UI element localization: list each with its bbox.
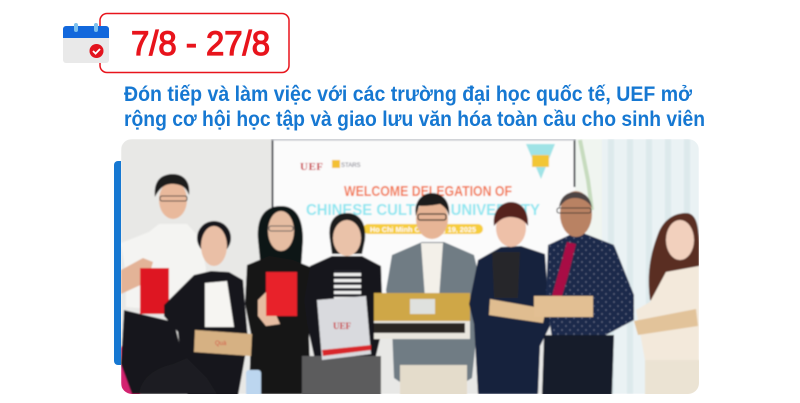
- projection screen: CHINESE CULTURE UNIVERSITY: [306, 202, 541, 219]
- person 4: UEF: [333, 321, 352, 331]
- water bottle: [246, 370, 261, 396]
- window and curtain: [574, 139, 699, 394]
- person 8: [634, 213, 700, 396]
- heading: Đón tiếp và làm việc với các trường đại học quốc tế, UEF mở: [124, 83, 692, 106]
- projection screen: WELCOME DELEGATION OF: [344, 183, 512, 200]
- person 2: Quà: [215, 341, 227, 347]
- date badge: [100, 14, 289, 72]
- projection screen: [270, 139, 576, 294]
- person 2: [164, 221, 252, 396]
- icon: calendar: [63, 23, 109, 63]
- photo: delegation group: [121, 139, 700, 398]
- projection screen: STARS: [341, 163, 361, 169]
- photo content: [121, 139, 700, 398]
- person 1: [121, 174, 206, 394]
- person 6: [469, 202, 550, 394]
- heading: rộng cơ hội học tập và giao lưu văn hóa toàn cầu cho sinh viên: [124, 108, 705, 131]
- projection screen: Ho Chi Minh City, Aug 19, 2025: [370, 225, 476, 234]
- blue accent bar: [114, 161, 121, 365]
- person 5: [374, 193, 487, 397]
- person 3: [245, 206, 313, 394]
- person 7: [534, 191, 634, 395]
- projection screen: UEF: [300, 161, 323, 173]
- pink chair: [121, 345, 142, 394]
- photo background wall: [121, 139, 553, 394]
- date badge: 7/8 - 27/8: [131, 25, 270, 63]
- backpack: [161, 365, 188, 394]
- heading: [124, 83, 705, 131]
- person 4: [302, 213, 383, 396]
